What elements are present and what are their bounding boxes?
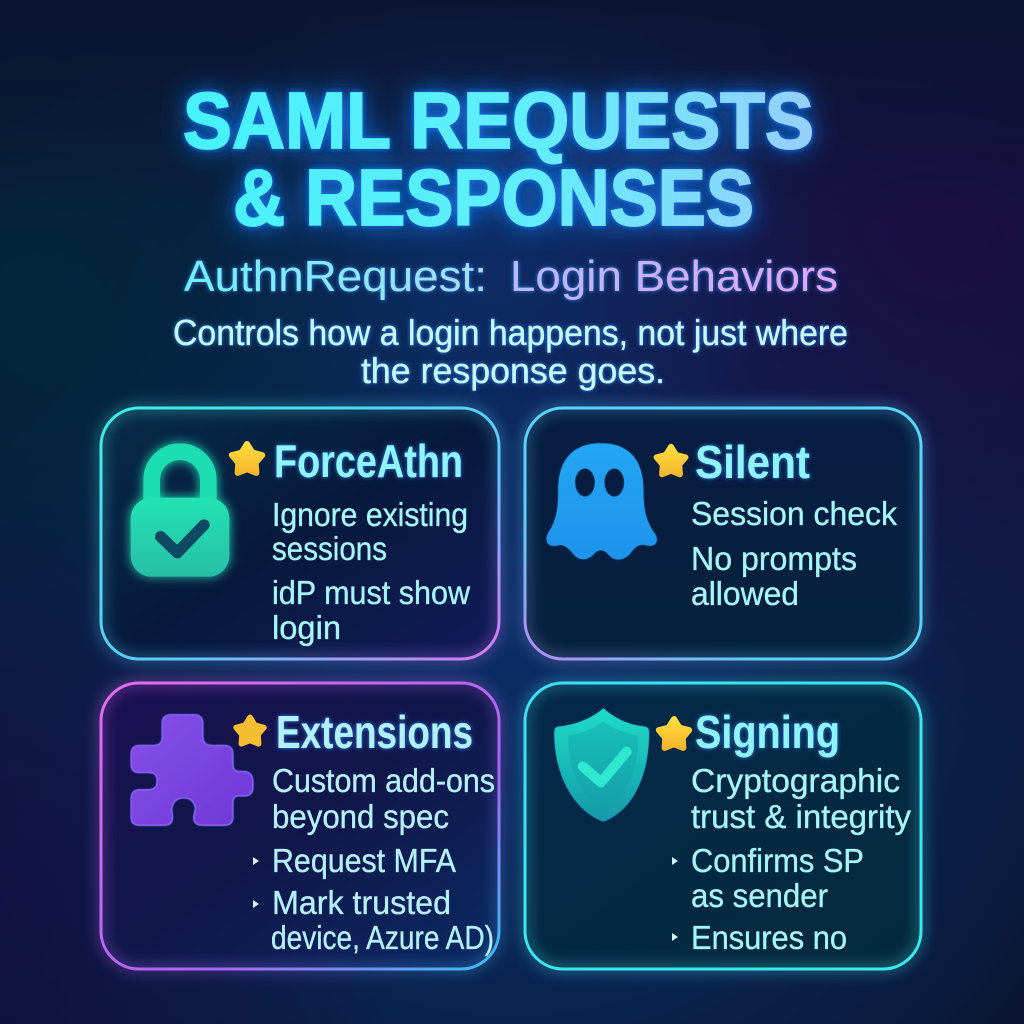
panel: Silent (525, 408, 921, 659)
heading: Signing: Signing (695, 706, 840, 758)
text: ForceAthn details: Ignore existing (272, 496, 468, 533)
text: Extensions details: Request MFA (272, 842, 456, 879)
icon: puzzle piece (131, 715, 253, 825)
text: Signing details: trust & integrity (691, 798, 911, 835)
panel frame: Extensions (101, 683, 499, 969)
text: ForceAthn details (272, 496, 470, 646)
icon: ghost (547, 443, 657, 559)
panel frame: ForceAthn (101, 408, 499, 659)
text: Extensions details: device, Azure AD) (271, 919, 494, 956)
icon: padlock with check (131, 452, 229, 577)
panel: Extensions (101, 683, 499, 969)
heading: Extensions: Extensions (276, 706, 473, 758)
text: Silent details: allowed (691, 575, 799, 612)
text: Extensions details (253, 762, 495, 956)
text: Extensions details: Mark trusted (272, 884, 451, 921)
icon: star (656, 447, 686, 474)
icon: shield with check (554, 708, 649, 822)
heading: ForceAthn: ForceAthn (274, 435, 463, 487)
subtitle (184, 252, 838, 301)
icon: star (659, 719, 689, 748)
text: Silent details: No prompts (691, 540, 857, 577)
text: Extensions details: beyond spec (272, 798, 449, 835)
text: ForceAthn details: idP must show (272, 574, 470, 611)
text: Extensions details: Custom add-ons (272, 762, 495, 799)
description: the response goes. (361, 350, 665, 391)
panel: ForceAthn (101, 408, 499, 659)
icon: star (232, 444, 262, 473)
panel: Signing (525, 683, 921, 969)
text: Signing details: Confirms SP (691, 842, 864, 879)
title (183, 76, 814, 242)
text: ForceAthn details: login (272, 609, 341, 646)
panel frame: Silent (525, 408, 921, 659)
description: Controls how a login happens, not just where (173, 312, 848, 353)
subtitle: AuthnRequest: (184, 252, 487, 301)
title: SAML REQUESTS (183, 76, 814, 165)
title: & RESPONSES (233, 153, 754, 242)
text: ForceAthn details: sessions (272, 530, 387, 567)
text: Signing details (672, 762, 911, 956)
panel frame: Signing (525, 683, 921, 969)
text: Signing details: Cryptographic (691, 762, 900, 799)
text: Signing details: Ensures no (691, 919, 847, 956)
description (173, 312, 848, 391)
icon: star (236, 717, 264, 744)
text: Silent details (691, 495, 897, 612)
subtitle: Login Behaviors (510, 252, 838, 301)
heading: Silent: Silent (695, 436, 810, 488)
text: Signing details: as sender (691, 877, 828, 914)
text: Silent details: Session check (691, 495, 897, 532)
